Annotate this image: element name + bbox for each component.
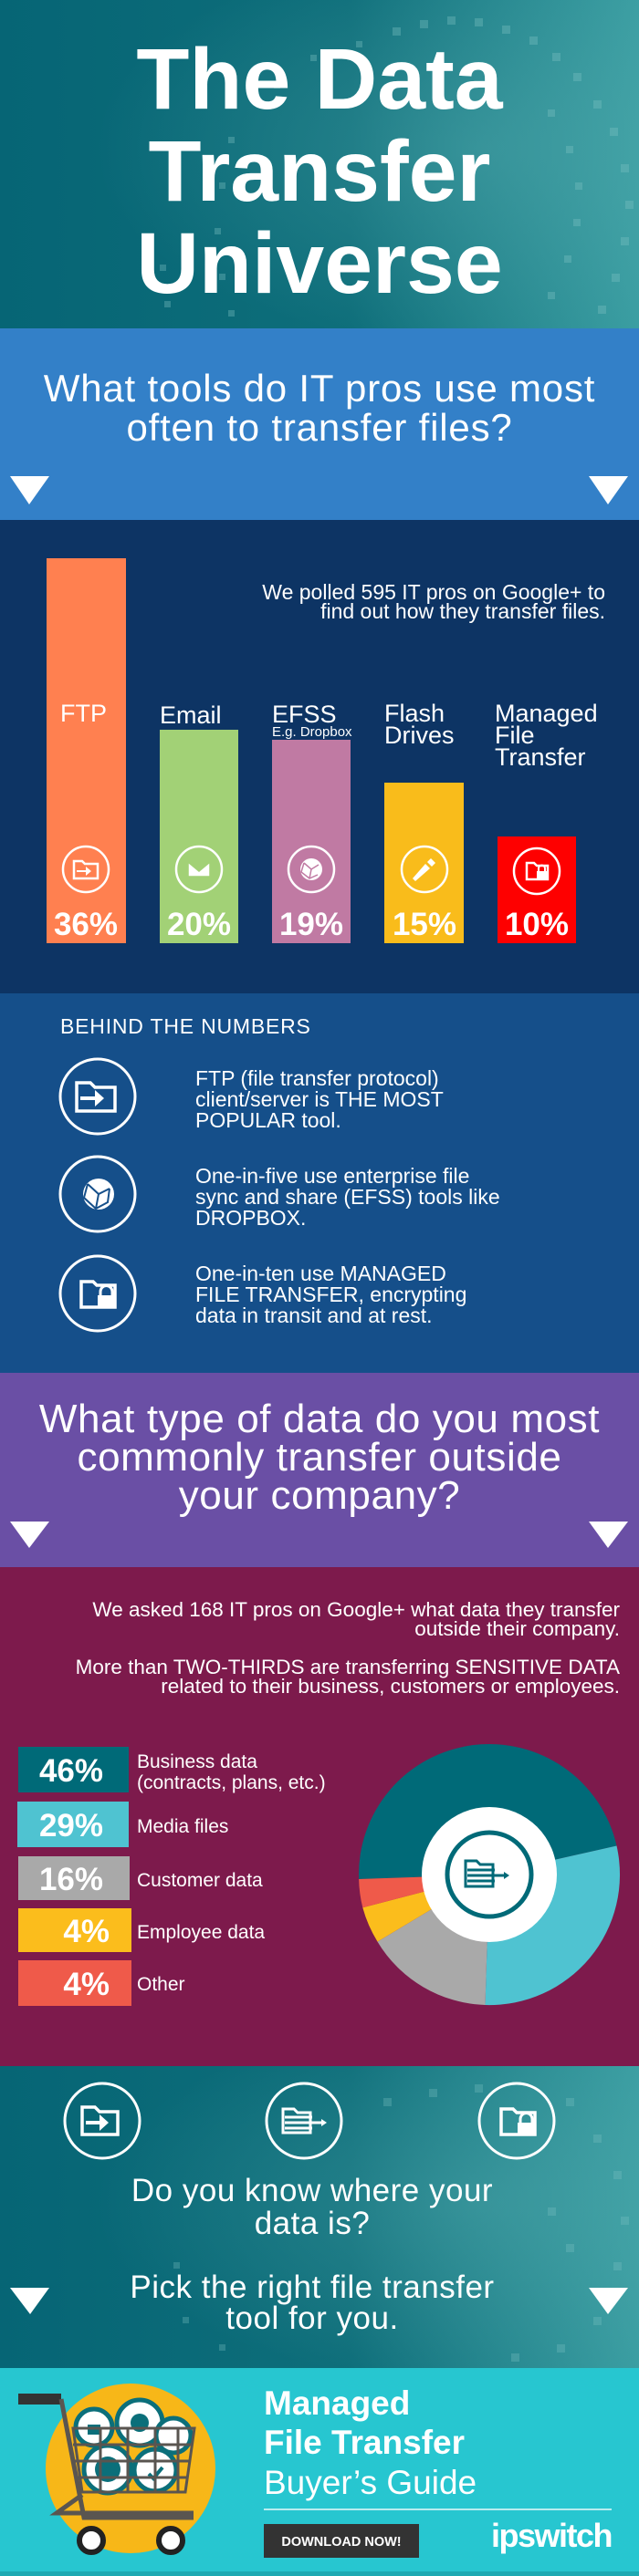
- heading: buyer's guide title: [264, 2384, 477, 2501]
- bar: EFSS: 19%: [279, 907, 343, 942]
- text: poll note: find out how they transfer files.: [320, 599, 605, 623]
- bar: Flash drives: Drives: [384, 722, 455, 749]
- legend: Business data: [137, 1751, 257, 1772]
- item: FTP: [60, 1059, 444, 1134]
- legend: 4%: [63, 1914, 110, 1949]
- bar: Managed File Transfer: Managed: [495, 700, 598, 727]
- legend: 4%: [63, 1967, 110, 2002]
- bar: Managed File Transfer: File: [495, 722, 535, 749]
- icon: folder lock: [479, 2083, 554, 2158]
- heading: buyer's guide title: Managed: [264, 2384, 410, 2422]
- heading: data type question: your company?: [179, 1473, 460, 1518]
- heading: buyer's guide title: File Transfer: [264, 2424, 465, 2461]
- title: The Data: [136, 31, 504, 128]
- text: pick the right tool: Pick the right file transfer: [130, 2270, 495, 2305]
- heading: data type question: commonly transfer outside: [77, 1435, 562, 1480]
- bar: Flash drives: Flash: [384, 700, 445, 727]
- bar: Flash drives: 15%: [393, 907, 456, 942]
- text: poll note: [262, 580, 605, 623]
- bar: EFSS: EFSS: [272, 701, 337, 728]
- bar: FTP: 36%: [54, 907, 118, 942]
- item: EFSS: sync and share (EFSS) tools like: [195, 1185, 500, 1209]
- legend: [17, 1747, 326, 2006]
- item: EFSS: One-in-five use enterprise file: [195, 1164, 469, 1188]
- item: MFT: [60, 1256, 466, 1331]
- heading: tools question: often to transfer files?: [126, 406, 513, 449]
- text: pick the right tool: tool for you.: [225, 2301, 399, 2336]
- bar: EFSS: E.g. Dropbox: [272, 724, 352, 740]
- text: survey note: [76, 1598, 621, 1698]
- arrow: left triangle: [10, 476, 49, 504]
- panel: closing call to action: [0, 2066, 639, 2368]
- icon: data transfer: [267, 2083, 341, 2158]
- panel: bar chart: [0, 520, 639, 993]
- arrow: left triangle: [10, 2288, 49, 2314]
- text: survey note: outside their company.: [414, 1617, 620, 1640]
- heading: tools question: [44, 367, 595, 449]
- text: survey note: related to their business, customers or employees.: [161, 1675, 620, 1698]
- bar: Email: Email: [160, 701, 222, 729]
- button: download now: DOWNLOAD NOW!: [281, 2535, 402, 2550]
- legend: Employee data: [137, 1922, 265, 1943]
- title: Universe: [136, 215, 503, 312]
- panel: question 2: [0, 1373, 639, 1567]
- text: survey note: We asked 168 IT pros on Google+ what data they transfer: [92, 1598, 621, 1621]
- bar: Managed File Transfer: Transfer: [495, 743, 586, 771]
- heading: data type question: [39, 1397, 600, 1518]
- icon: folder arrow: [65, 2083, 140, 2158]
- heading: tools question: What tools do IT pros use most: [44, 367, 595, 410]
- bar: FTP: [47, 558, 126, 943]
- text: survey note: More than TWO-THIRDS are transferring SENSITIVE DATA: [76, 1656, 620, 1678]
- button: download now: [264, 2524, 419, 2558]
- item: MFT: data in transit and at rest.: [195, 1304, 433, 1327]
- bar: EFSS: [272, 701, 352, 943]
- panel: data type chart: [0, 1567, 639, 2066]
- legend: Customer data: [137, 1870, 263, 1891]
- panel: buyer's guide footer: [0, 2368, 639, 2576]
- text: pick the right tool: [130, 2270, 495, 2336]
- item: MFT: One-in-ten use MANAGED: [195, 1262, 446, 1285]
- arrow: left triangle: [10, 1522, 49, 1548]
- heading: buyer's guide title: Buyer’s Guide: [264, 2464, 477, 2501]
- bar: Managed File Transfer: [495, 700, 598, 943]
- heading: data type question: What type of data do you most: [39, 1397, 600, 1441]
- legend: Other: [137, 1974, 185, 1995]
- bar: Managed File Transfer: 10%: [505, 907, 569, 942]
- item: EFSS: [60, 1157, 500, 1231]
- heading: behind the numbers: BEHIND THE NUMBERS: [60, 1014, 311, 1038]
- arrow: right triangle: [589, 2288, 628, 2314]
- panel: question 1: [0, 328, 639, 520]
- panel: title header: [0, 0, 639, 328]
- text: where is your data: Do you know where your: [131, 2173, 493, 2208]
- item: MFT: FILE TRANSFER, encrypting: [195, 1283, 466, 1306]
- donut chart: [359, 1744, 620, 2005]
- item: FTP: client/server is THE MOST: [195, 1087, 444, 1111]
- text: poll note: We polled 595 IT pros on Google+ to: [262, 580, 605, 604]
- legend: 29%: [39, 1808, 103, 1844]
- bar: Email: 20%: [167, 907, 231, 942]
- legend: 46%: [39, 1753, 103, 1789]
- title: [136, 31, 504, 312]
- logo: ipswitch: ipswitch: [491, 2517, 612, 2554]
- item: EFSS: DROPBOX.: [195, 1206, 306, 1230]
- item: FTP: FTP (file transfer protocol): [195, 1066, 439, 1090]
- arrow: right triangle: [589, 1522, 628, 1548]
- item: FTP: POPULAR tool.: [195, 1108, 341, 1132]
- bar: Flash drives: [384, 700, 464, 943]
- legend: 16%: [39, 1862, 103, 1897]
- bar: FTP: FTP: [60, 700, 107, 727]
- text: where is your data: data is?: [255, 2206, 370, 2241]
- text: where is your data: [131, 2173, 493, 2241]
- legend: (contracts, plans, etc.): [137, 1772, 326, 1793]
- title: Transfer: [149, 123, 490, 220]
- panel: behind the numbers: [0, 993, 639, 1373]
- bar: Email: [160, 701, 238, 943]
- legend: Media files: [137, 1816, 228, 1837]
- icon: shopping cart: [18, 2384, 215, 2553]
- arrow: right triangle: [589, 476, 628, 504]
